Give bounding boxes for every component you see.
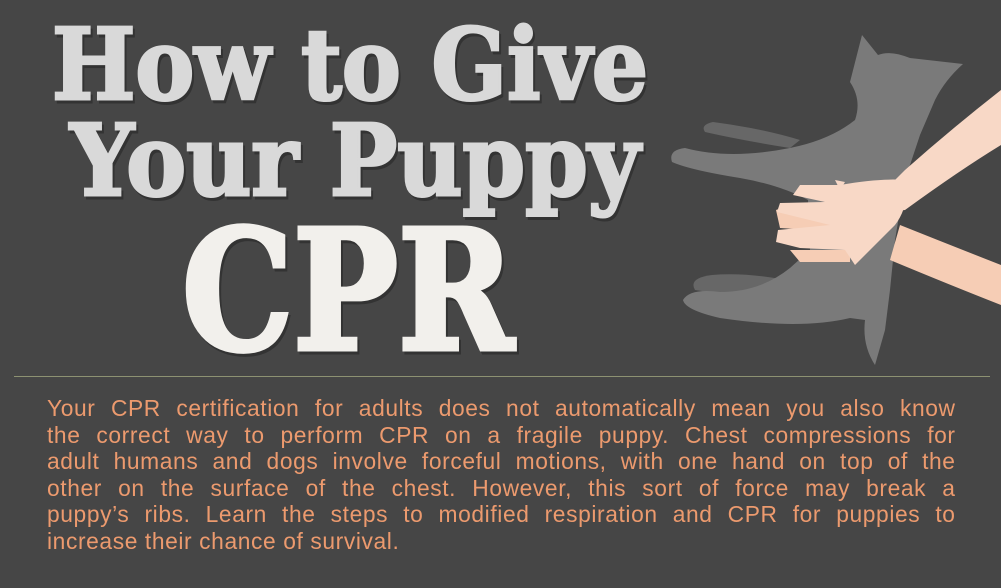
hands: [776, 90, 1001, 305]
intro text block: Your CPR certification for adults does not automatically mean you also know: [47, 395, 956, 421]
title: How to Give: [54, 11, 650, 126]
title: Your Puppy: [71, 107, 645, 222]
divider line: [14, 376, 990, 377]
illustration: puppy with hands: [671, 35, 1001, 365]
title: [52, 8, 650, 380]
puppy silhouette: [671, 35, 963, 365]
intro text block: other on the surface of the chest. However, this sort of force may break a: [47, 475, 956, 501]
heading line 1: How to Give: [52, 8, 648, 123]
intro text block: increase their chance of survival.: [47, 528, 399, 554]
intro text block: adult humans and dogs involve forceful motions, with one hand on top of the: [47, 448, 956, 474]
heading line 2: Your Puppy: [69, 104, 643, 219]
intro text block: puppy’s ribs. Learn the steps to modified respiration and CPR for puppies to: [47, 501, 956, 527]
intro text block: the correct way to perform CPR on a fragile puppy. Chest compressions for: [47, 422, 956, 448]
intro text block: [47, 395, 956, 554]
